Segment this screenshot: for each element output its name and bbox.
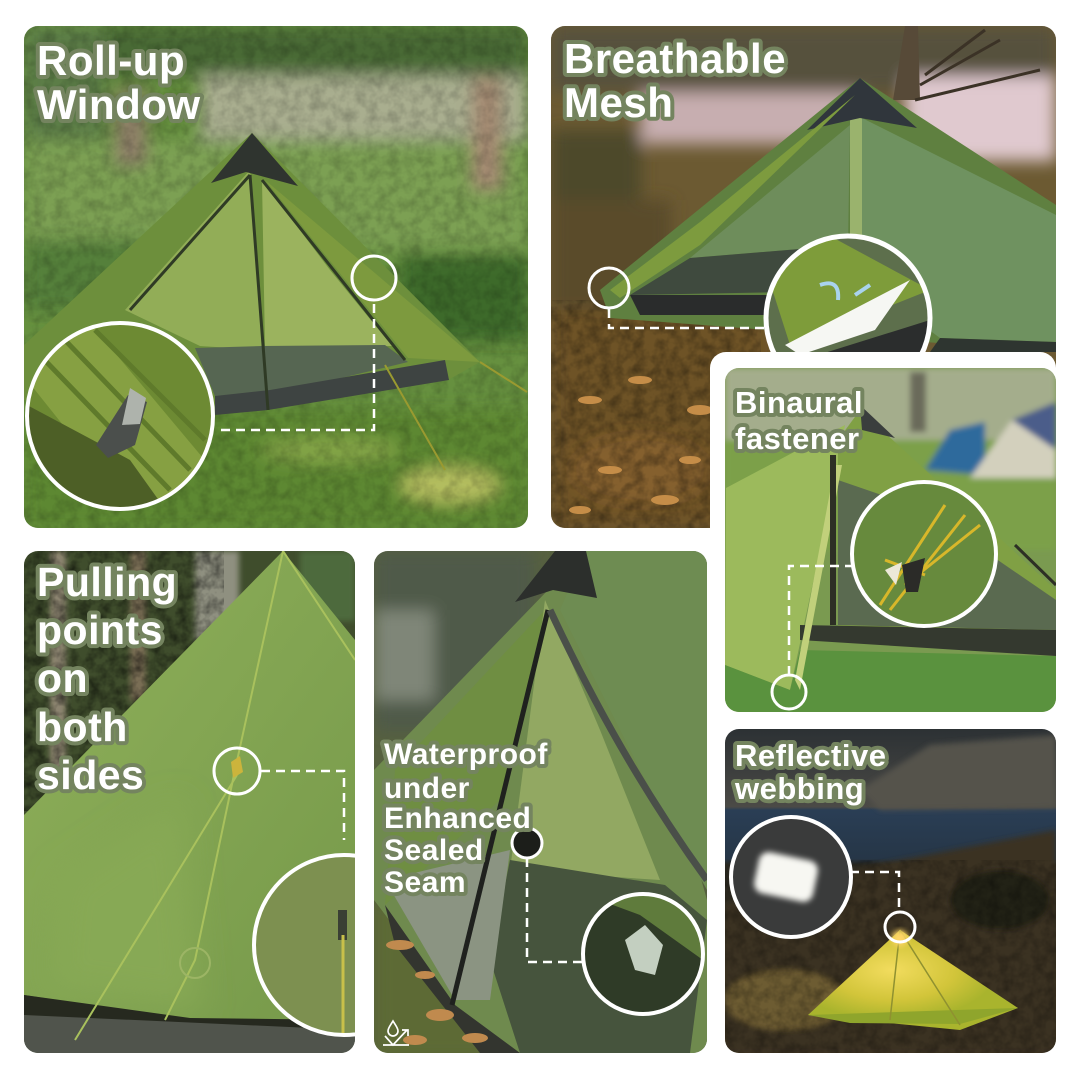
zoom circle [27,323,213,509]
panel: pulling points [24,551,355,1053]
panel: roll-up window [24,26,528,530]
zoom circle [252,853,355,1037]
tent body [24,133,527,470]
zoom circle [583,894,703,1014]
panel: reflective webbing [725,729,1056,1053]
connector [852,870,900,907]
heading: pulling points: both [37,704,128,750]
heading: binaural fastener: Binaural [735,385,863,420]
heading: pulling points: on [37,655,88,701]
heading: pulling points: sides [37,752,144,798]
callout ring [512,828,542,858]
zoom circle [764,234,932,352]
callout ring [352,256,396,300]
panel: breathable mesh [551,26,1056,530]
connector [609,309,765,328]
connector [527,858,583,962]
zoom circle [731,817,851,937]
callout ring [772,675,806,709]
heading: breathable mesh: Mesh [564,79,673,126]
heading: waterproof: Sealed [384,834,484,867]
heading: reflective webbing: webbing [734,771,864,806]
callout ring [589,268,629,308]
heading: waterproof: under [384,772,470,805]
heading: waterproof: Enhanced [384,802,531,835]
heading: waterproof: Waterproof [384,738,548,771]
connector [261,771,344,840]
heading: breathable mesh: Breathable [564,35,786,82]
icon: waterproof drop [383,1021,409,1045]
heading: roll-up window: Roll-up [37,37,185,84]
connector [789,566,852,675]
heading: roll-up window: Window [37,81,201,128]
heading: binaural fastener: fastener [735,421,860,456]
heading: reflective webbing: Reflective [735,738,886,773]
callout ring [214,748,260,794]
heading: pulling points: Pulling [37,559,177,605]
zoom circle [852,482,996,626]
heading: waterproof: Seam [384,866,466,899]
callout ring [885,912,915,942]
panel: waterproof [374,551,707,1060]
heading: pulling points: points [37,607,163,653]
panel: binaural fastener [710,352,1056,712]
connector [215,304,374,430]
